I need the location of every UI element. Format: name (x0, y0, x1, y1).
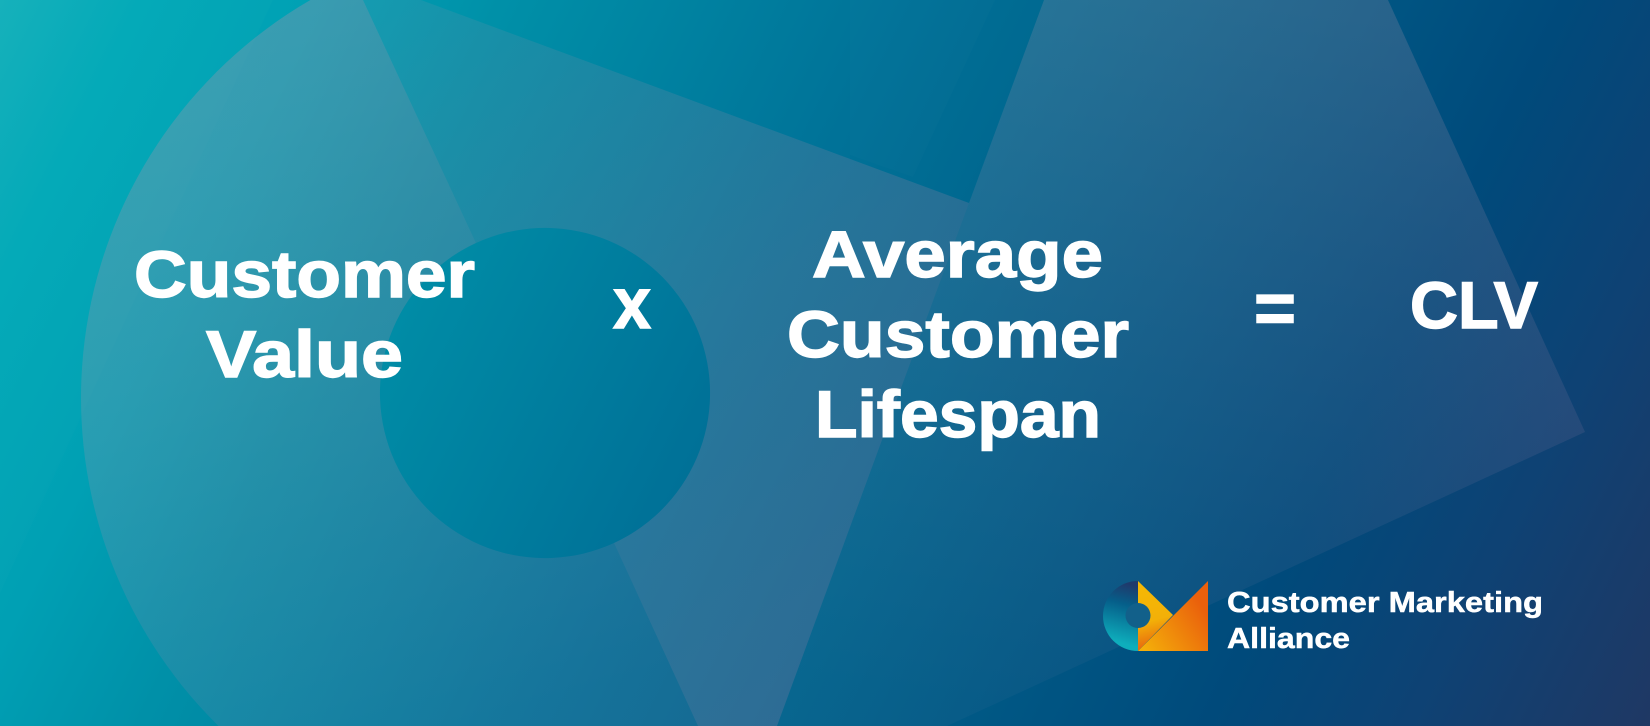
faint background facets (0, 0, 995, 593)
term: Average Customer Lifespan: Lifespan (815, 377, 1101, 451)
term: Customer Value: Value (206, 317, 403, 391)
term: Customer Value: Customer (134, 237, 475, 311)
term: Average Customer Lifespan (787, 217, 1129, 451)
logo wordmark: Alliance (1227, 623, 1350, 655)
operator: equals: = (1254, 269, 1296, 349)
logo wordmark: Customer Marketing (1227, 587, 1543, 619)
logo wordmark (1227, 587, 1543, 655)
decorative facet on right (777, 0, 1585, 726)
logo icon (1103, 581, 1208, 651)
term: Average Customer Lifespan: Customer (787, 297, 1129, 371)
term: Customer Value (134, 237, 475, 391)
term: Average Customer Lifespan: Average (812, 217, 1103, 291)
decorative facet behind centre (363, 0, 969, 726)
logo: Customer Marketing Alliance (1103, 581, 1543, 655)
operator: multiply: x (613, 264, 651, 344)
result: CLV: CLV (1410, 268, 1538, 342)
decorative half ring (81, 0, 698, 726)
